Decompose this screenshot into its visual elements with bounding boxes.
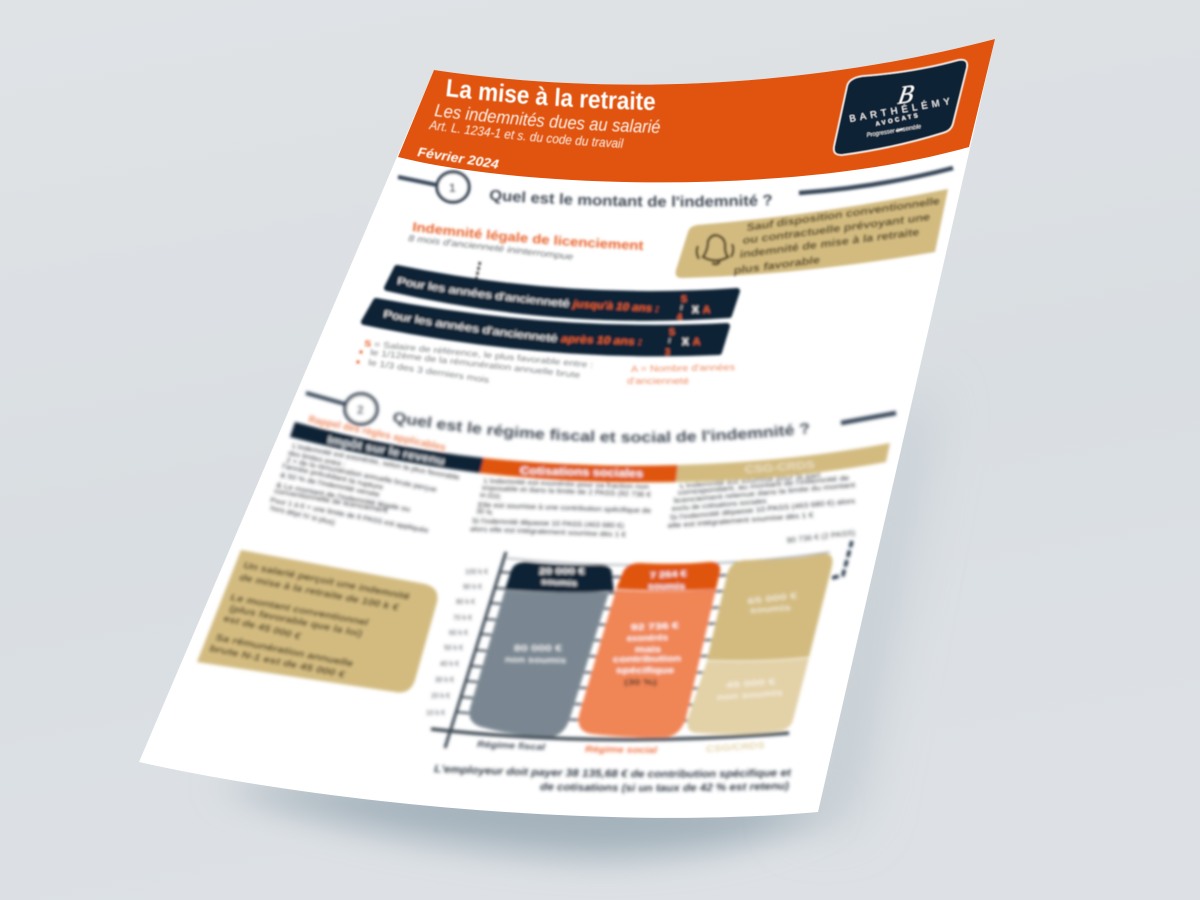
seniority legend: A = Nombre d'années [630,362,736,374]
income tax text: 2 × de la rémunération annuelle brute perçue [284,456,438,494]
logo: Progresser ensemble [866,124,922,138]
CSG-CRDS text: elle est intégralement soumise dès 1 € [668,512,814,530]
y axis labels: 70 k € [453,615,472,622]
section 2 heading: Quel est le régime fiscal et social de l'indemnité ? [391,410,811,445]
logo [832,58,969,157]
column band: CSG-CRDS: CSG-CRDS [744,460,816,474]
bar: fiscal regime: 80 000 € [514,644,563,653]
section 2 number badge: 2 [357,403,364,417]
section 1 rule [799,168,953,193]
column band: income tax: Impôt sur le revenu [324,432,448,468]
income tax text: & 50 % de l'indemnité versée [278,470,381,498]
formula bar 1: Pour les années d'ancienneté [395,274,572,310]
seniority note: 8 mois d'ancienneté ininterrompue [407,234,574,261]
formula bar 2: S [669,327,675,337]
subtitle: Les indemnités dues au salarié [434,103,661,134]
bar: social regime: 7 264 € [650,569,688,580]
callout: convention: ou contractuelle prévoyant une [742,214,931,245]
section 1 number badge: 1 [449,181,456,195]
section 2 number badge [306,393,377,424]
example callout: brute N-1 est de 45 000 € [208,643,347,681]
formula bar 1: X [692,305,699,316]
x axis labels: Régime fiscal [477,739,546,752]
bar: fiscal regime: soumis [541,577,578,588]
income tax text: hors dépt IV si plus) [268,504,336,528]
bar: CSG-CRDS: non soumis [716,688,784,702]
conclusion: de cotisations (si un taux de 42 % est retenu) [540,780,790,794]
bar: social regime: (30 %) [624,678,657,687]
income tax text: conventionnelle de licenciement [272,488,390,514]
bar: social regime: 92 736 € [631,621,680,632]
section 1 [354,164,956,386]
section 1 number badge [398,172,469,202]
income tax text: & Le montant de l'indemnité légale ou [274,480,412,514]
example callout: Sa rémunération annuelle [214,632,355,670]
y axis labels: 10 k € [426,710,445,717]
CSG-CRDS text [666,471,857,530]
x axis [431,729,789,740]
income tax text: l'année précédant la rupture [280,462,385,492]
bar: CSG-CRDS [686,551,835,737]
CSG-CRDS text: licenciement retenue dans la limite du montant [674,482,856,505]
social contributions text: imposable et dans la limite de 2 PASS (92 736 € [480,484,652,499]
y axis labels: 60 k € [449,630,468,637]
formula bar 1: S [681,294,687,304]
logo: B [896,79,917,110]
callout: convention: Sauf disposition conventionnelle [746,196,940,232]
y axis labels: 90 k € [463,584,482,591]
rules reminder: Rappel des règles applicables [305,414,448,454]
y axis labels: 50 k € [444,645,463,652]
legal severance heading: Indemnité légale de licenciement [411,220,645,252]
y axis labels [426,569,488,717]
bar: social regime: spécifique [616,666,675,675]
CSG-CRDS text: correspondant, au montant de l'indemnité de [678,475,850,497]
bar: fiscal regime: 20 000 € [539,567,586,576]
example callout [196,548,440,695]
example callout: Le montant conventionnel [229,592,370,629]
formula bar 2: après 10 ans : [558,332,644,348]
income tax text: L'indemnité est exonérée, selon la plus favorable [290,442,461,482]
formula bar 2: X [682,337,689,348]
x axis labels: Régime social [585,744,658,755]
social contributions text: L'indemnité est exonérée pour sa fraction non [482,476,651,491]
column band: income tax [288,420,486,476]
formula bar 2: Pour les années d'ancienneté [382,308,560,344]
x axis labels [475,738,766,756]
logo: BARTHÉLÉMY [848,96,950,123]
section 1 heading: Quel est le montant de l'indemnité ? [488,188,774,209]
income tax text [268,442,461,534]
y axis labels: 30 k € [435,677,454,684]
example callout: (plus favorable que la loi) [228,603,363,640]
column band: CSG-CRDS [672,441,892,484]
seniority legend: d'ancienneté [626,376,690,386]
logo: AVOCATS [875,112,918,127]
salary reference note: le 1/3 des 3 derniers mois [367,358,490,384]
section 2 rule [841,413,896,423]
header band [398,39,995,182]
bar: social regime [576,559,723,740]
threshold bracket [832,541,852,578]
y axis labels: 100 k € [465,569,488,576]
threshold label: 90 736 € (2 PASS) [786,528,856,545]
column band: social contributions [476,456,680,485]
bar: CSG-CRDS: 65 000 € [747,591,799,606]
salary reference note [354,338,593,384]
chart grid [456,552,830,721]
icon: bell [697,235,733,264]
CSG-CRDS text: exclu de cotisations sociales [672,498,767,513]
bar: CSG-CRDS: soumis [749,603,792,615]
formula bar 1: jusqu'à 10 ans : [569,297,661,314]
bar: social regime: contribution [613,654,681,664]
formula bar 2: A [693,337,700,348]
header text [416,78,661,170]
social contributions text [468,476,652,539]
bar: social regime: exonérés [627,633,669,643]
y axis labels: 20 k € [431,693,450,700]
CSG-CRDS text: L'indemnité est soumise pour la part [680,472,821,490]
example callout: Un salarié perçoit une indemnité [242,560,411,603]
bar: social regime: mais [635,645,662,654]
example callout: est de 45 000 € [222,613,302,643]
social contributions text: 30 % [476,508,492,517]
stacked bar chart [425,528,857,756]
y axis labels: 80 k € [456,599,475,606]
formula bar 1: 4 [677,312,682,322]
conclusion: L'employeur doit payer 38 135,68 € de contribution spécifique et [434,763,792,780]
CSG-CRDS text: Si l'indemnité dépasse 10 PASS (463 680 €) alors [670,498,856,522]
conclusion [432,762,793,796]
bar: social regime: soumis [648,582,686,591]
formula bar 2 [359,296,732,358]
connector [476,262,480,280]
paper shadow [215,400,930,858]
date: Février 2024 [416,146,500,170]
formula bar 1: A [703,305,710,316]
social contributions text: alors elle est intégralement soumise dès 1 € [470,526,626,539]
callout: convention [674,188,950,280]
callout: convention: plus favorable [732,256,821,278]
formula bar 2: 3 [665,347,670,357]
social contributions text: Elle est soumise à une contribution spécifique de [478,502,651,515]
salary reference note: S = Salaire de référence, le plus favorable entre : [363,338,593,368]
legal reference: Art. L. 1234-1 et s. du code du travail [428,120,624,148]
salary reference note: le 1/12ème de la rémunération annuelle brute [369,348,581,379]
column band: social contributions: Cotisations sociales [517,463,646,480]
income tax text: des limites entre : [286,449,345,468]
social contributions text: Si l'indemnité dépasse 10 PASS (463 680 €) [472,518,624,530]
social contributions text: en 2024) [478,491,502,502]
paper sheet [139,39,995,818]
section 2 [196,389,899,796]
x axis labels: CSG/CRDS [705,740,765,754]
bar: fiscal regime [468,560,616,738]
y axis labels: 40 k € [440,661,459,668]
y axis [445,552,506,748]
example callout: de mise à la retraite de 100 k € [238,572,400,614]
seniority legend [626,362,736,386]
callout: convention: indemnité de mise à la retraite [738,228,920,259]
income tax text: Pour 1 à 6 × une limite de 6 PASS est appliquée [268,496,430,534]
bar: CSG-CRDS: 45 000 € [725,677,777,690]
formula bar 1 [382,263,742,323]
title: La mise à la retraite [446,78,656,111]
bar: fiscal regime: non soumis [505,655,567,665]
